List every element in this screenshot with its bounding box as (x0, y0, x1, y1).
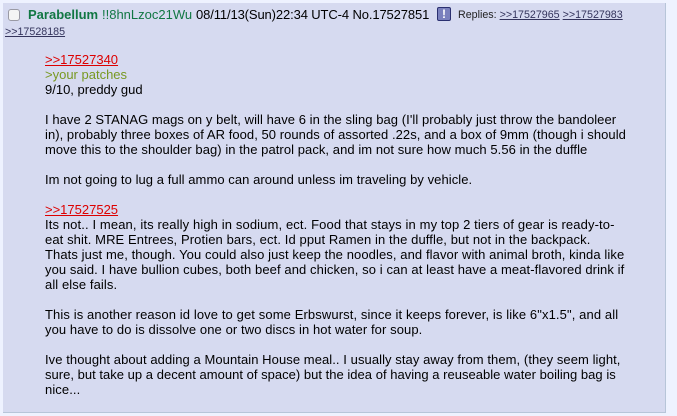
paragraph: food: all else fails. (45, 277, 117, 292)
paragraph: food: Its not.. I mean, its really high in sodium, ect. Food that stays in my top 2 tiers of gear is ready-to- (45, 217, 615, 232)
paragraph: food (45, 217, 624, 292)
date and post number: 08/11/13(Sun)22:34 UTC-4 No.17527851 (196, 7, 429, 22)
paragraph: Mountain House: Ive thought about adding a Mountain House meal.. I usually stay away from them, (they seem light, (45, 352, 620, 367)
quote link 2: >>17527525 (45, 202, 118, 217)
tripcode: !!8hnLzoc21Wu (102, 7, 192, 22)
replies list: Replies: >>17527965 >>17527983 (458, 9, 623, 21)
paragraph: ammo loadout: in), probably three boxes of AR food, 50 rounds of assorted .22s, and a box of 9mm (though i should (45, 127, 626, 142)
paragraph: Erbswurst (45, 307, 618, 337)
paragraph: Erbswurst: you have to do is dissolve one or two discs in hot water for soup. (45, 322, 422, 337)
reply overflow link: >>17528185 (5, 26, 65, 38)
poster name: Parabellum (28, 7, 98, 22)
paragraph: Mountain House: sure, but take up a decent amount of space) but the idea of having a reuseable water boiling bag is (45, 367, 616, 382)
icon: report button: ! (442, 7, 446, 21)
paragraph: ammo loadout: I have 2 STANAG mags on y belt, will have 6 in the sling bag (I'll probably just throw the bandoleer (45, 112, 616, 127)
paragraph: food: eat shit. MRE Entrees, Protien bars, ect. Id pput Ramen in the duffle, but not in the backpack. (45, 232, 590, 247)
paragraph: ammo loadout (45, 112, 626, 157)
paragraph: food: Thats just me, though. You could also just keep the noodles, and flavor with animal broth, kinda like (45, 247, 624, 262)
icon: report button (437, 7, 451, 21)
paragraph: ammo loadout: move this to the shoulder bag) in the patrol pack, and im not sure how much 5.56 in the duffle (45, 142, 587, 157)
paragraph: ammo can: Im not going to lug a full ammo can around unless im traveling by vehicle. (45, 172, 472, 187)
greentext: >your patches (45, 67, 127, 82)
paragraph: Mountain House: nice... (45, 382, 80, 397)
paragraph: Mountain House (45, 352, 620, 397)
quote link 1: >>17527340 (45, 52, 118, 67)
checkbox (8, 9, 20, 21)
paragraph: food: you said. I have bullion cubes, both beef and chicken, so i can at least have a meat-flavored drink if (45, 262, 624, 277)
paragraph: Erbswurst: This is another reason id love to get some Erbswurst, since it keeps forever, is like 6"x1.5", and all (45, 307, 618, 322)
rating line: 9/10, preddy gud (45, 82, 143, 97)
